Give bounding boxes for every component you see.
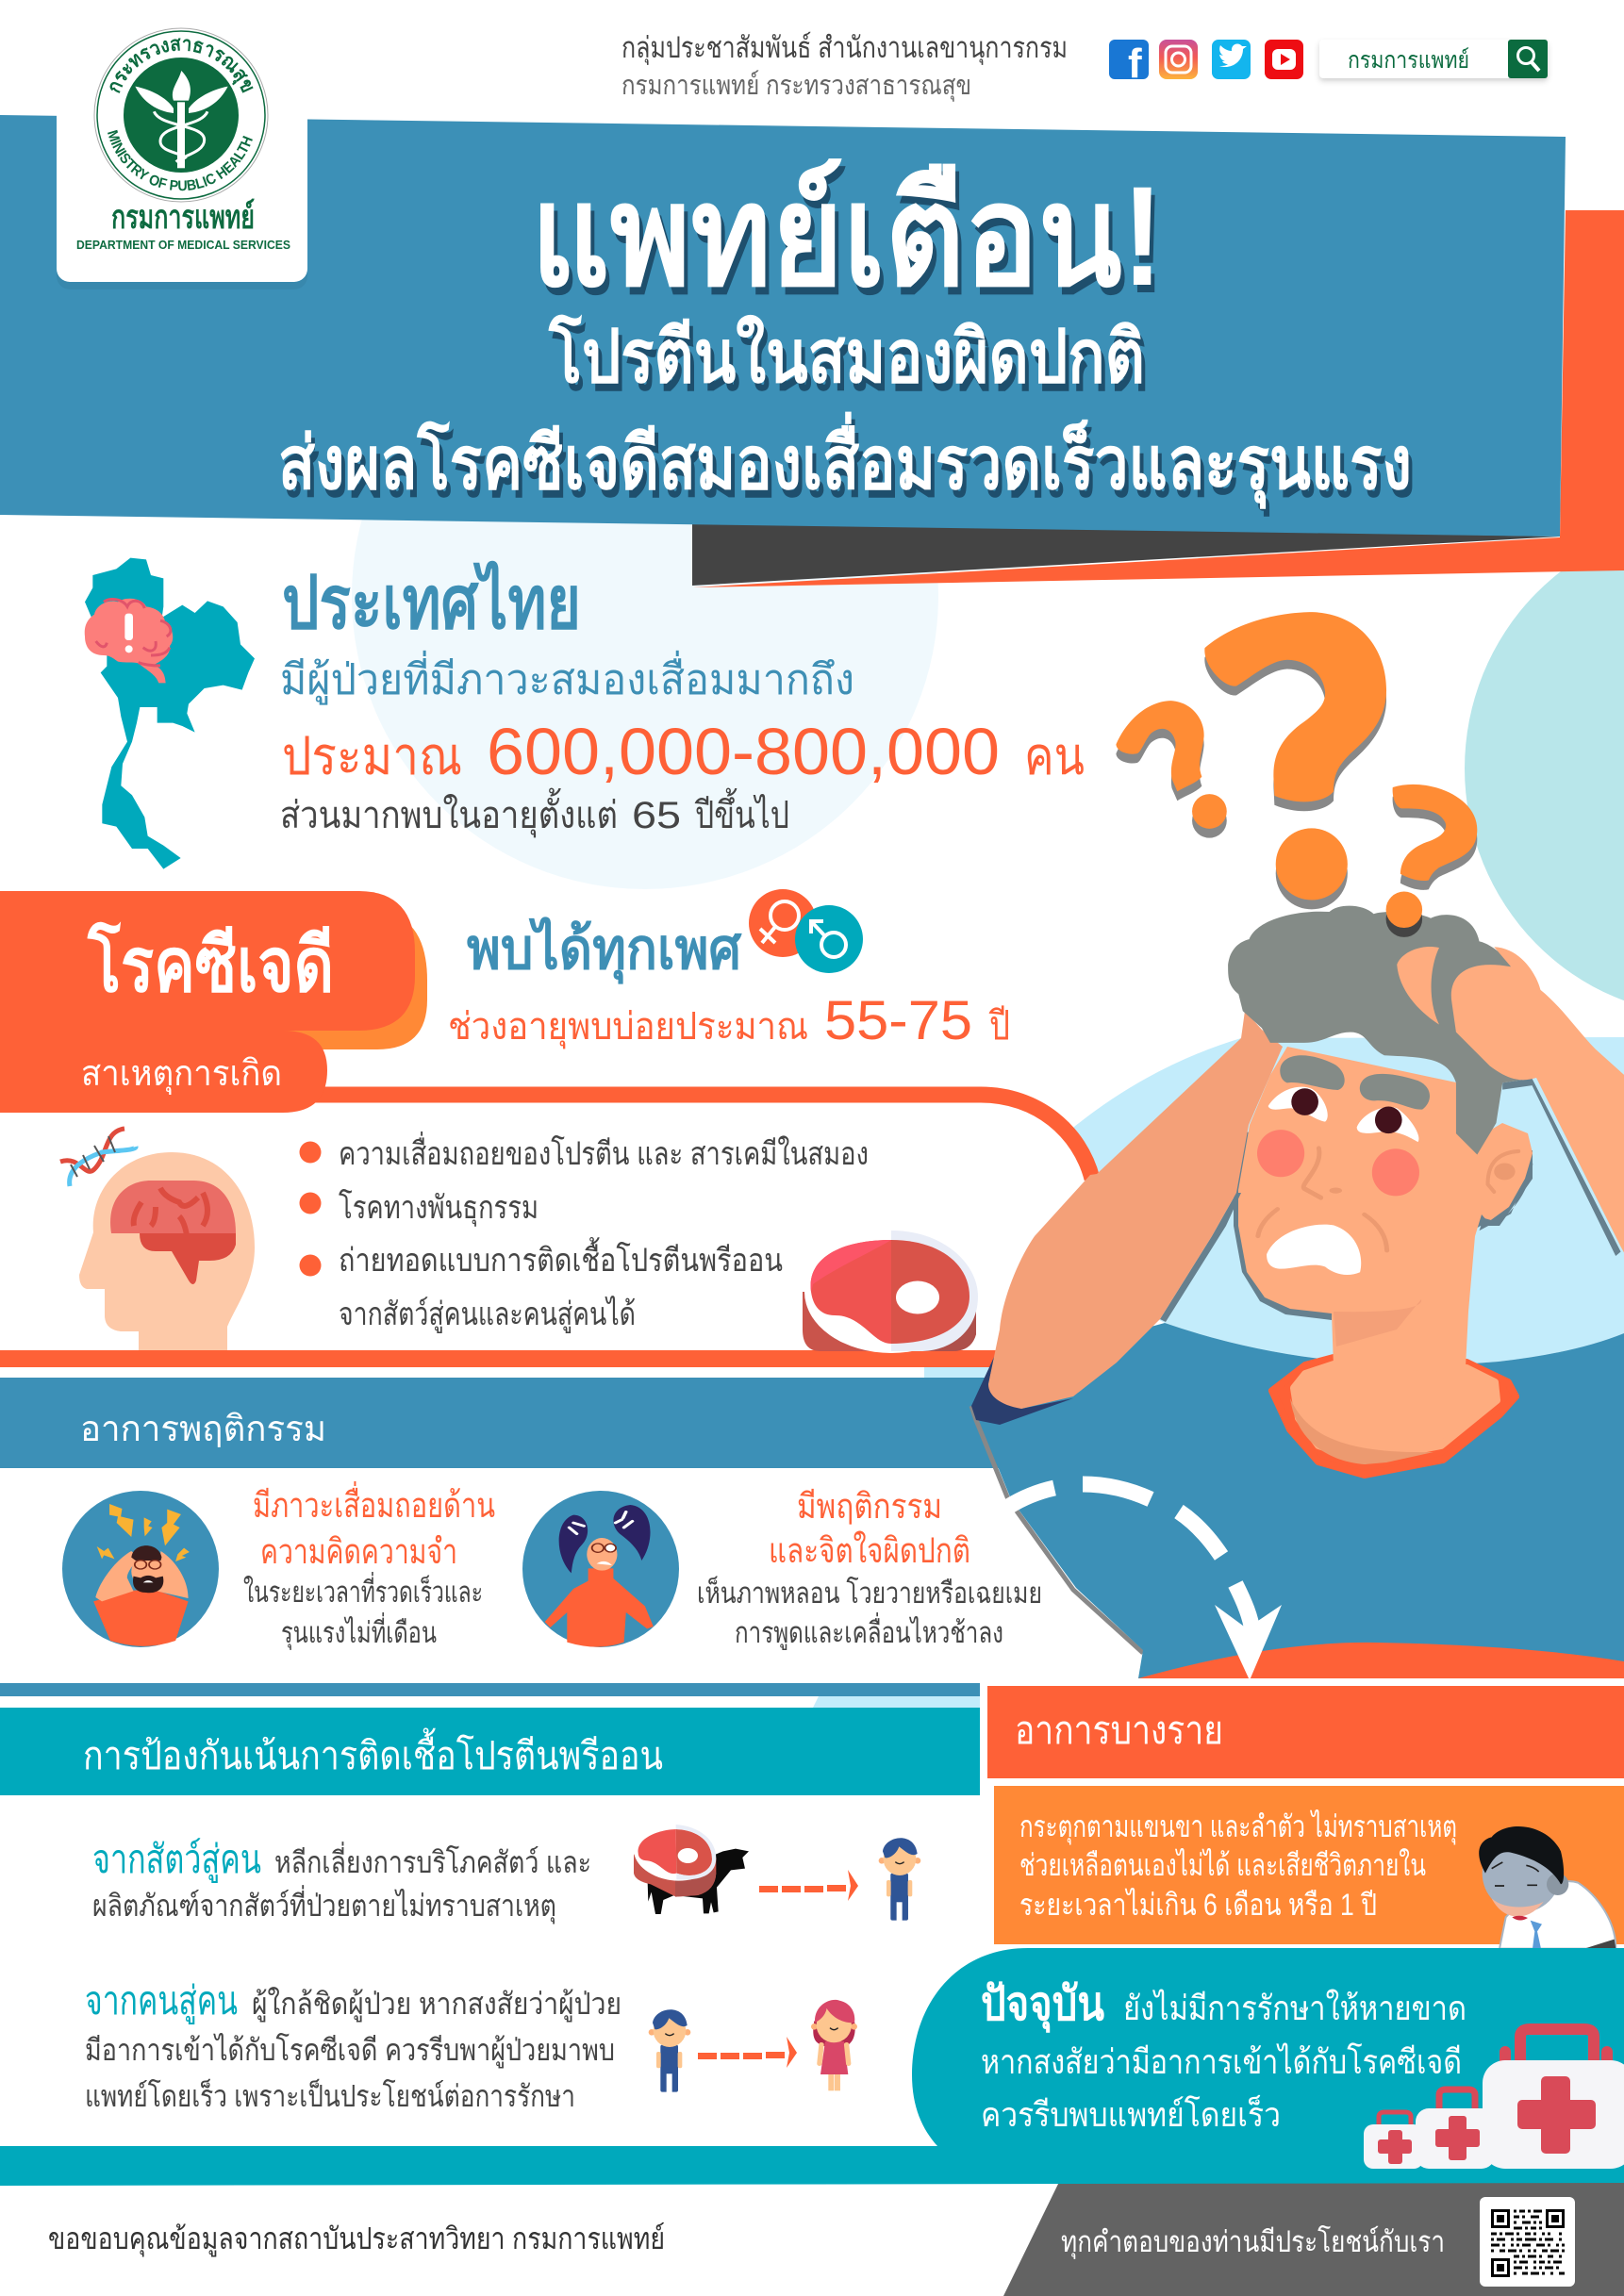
heading: some patients: อาการบางราย [1015,1709,1223,1752]
ear shadow [1480,1163,1533,1231]
logo seal: MINISTRY OF PUBLIC HEALTH [108,130,253,190]
behaviour heading: อาการพฤติกรรม [80,1410,326,1449]
background shape behind the head: light blue [981,1037,1624,1365]
title: ส่งผลโรคซีเจดีสมองเสื่อมรวดเร็วและรุนแรง [278,411,1412,509]
sleeve [971,1355,1073,1425]
text: animal to human: ผลิตภัณฑ์จากสัตว์ที่ป่วยตายไม่ทราบสาเหตุ [92,1885,556,1924]
icon: girl [811,2000,857,2090]
text: severe symptoms: ระยะเวลาไม่เกิน 6 เดือน หรือ 1 ปี [1019,1888,1377,1922]
left arm shadow [1160,1193,1241,1322]
text: age range 55-75: 55-75 [824,990,972,1051]
icon: gender symbols [749,889,863,973]
chest [1294,1364,1497,1461]
text: age 65: 65 [632,795,681,836]
text: current treatment: ควรรีบพบแพทย์โดยเร็ว [981,2093,1281,2134]
text: human to human: แพทย์โดยเร็ว เพราะเป็นประโยชน์ต่อการรักษา [85,2078,575,2113]
section bar: prevention [0,1708,980,1795]
stat: 600,000-800,000 patients: คน [1024,726,1085,785]
banner: title background [0,115,1566,537]
collar [1272,1358,1516,1475]
icon: meat and cow [630,1820,749,1914]
header text: department: กรมการแพทย์ กระทรวงสาธารณสุข [621,70,971,102]
shirt [971,1323,1624,1678]
arrow: animal to human [759,1870,858,1901]
arrow: human to human [698,2037,797,2068]
text: cognitive decline: ความคิดความจำ [260,1532,457,1571]
heading: causes: สาเหตุการเกิด [81,1054,282,1095]
text: all genders: พบได้ทุกเพศ [467,916,742,984]
text: age 65: ปีขึ้นไป [695,787,789,836]
bottom strip [0,2146,1624,2186]
header text: department [621,31,1068,102]
background circle: pale blue [352,303,938,889]
text: age range 55-75: ปี [988,1003,1010,1048]
text: human to human [85,1978,621,2113]
person: worried man [971,892,1624,1678]
text: current treatment [981,1977,1467,2134]
text: age range 55-75: ช่วงอายุพบบ่อยประมาณ [448,1006,808,1049]
text: cognitive decline: ในระยะเวลาที่รวดเร็วและ [243,1572,483,1609]
panel tab: CJD [0,891,415,1031]
text: animal to human: จากสัตว์สู่คน [92,1837,261,1883]
text: cognitive decline [243,1480,495,1651]
icon: instagram [1159,40,1198,79]
question mark dot over hair [1386,892,1422,937]
stat: 600,000-800,000 patients: 600,000-800,000 [487,715,1000,788]
background strip [924,1367,1000,1378]
right hand and arm [1451,947,1624,1277]
background blob: pale teal [1465,521,1624,1016]
divider strip [0,1683,980,1696]
logo name English: DEPARTMENT OF MEDICAL SERVICES [76,238,290,252]
eyebrows [1280,1055,1345,1090]
pale strip [813,1696,980,1708]
icon: twitter [1212,40,1251,79]
icon: meat [803,1231,978,1353]
icon: man with headache [62,1491,219,1647]
heading bar: some patients [987,1686,1624,1778]
text: current treatment: ปัจจุบัน [981,1977,1104,2033]
text: age range 55-75 [448,990,1010,1051]
mouth and wrinkles [1258,1209,1387,1275]
text: severe symptoms [1019,1809,1457,1922]
panel: current treatment [912,1948,1624,2169]
text: age 65 [280,787,789,838]
text: abnormal behaviour: เห็นภาพหลอน โวยวายหรือเฉยเมย [697,1576,1042,1610]
list: causes [300,1131,869,1333]
right arm shadow [1502,1079,1621,1256]
chest shadow [1290,1398,1433,1464]
fingers in hair [1397,947,1439,1025]
arrow: dashed down to symptoms [1008,1484,1282,1680]
text: severe symptoms: กระตุกตามแขนขา และลำตัว ไม่ทราบสาเหตุ [1019,1809,1457,1845]
icon: boy patient [649,2009,690,2092]
neck shadow [1334,1299,1421,1346]
panel: severe symptoms [994,1786,1624,1944]
panel frame: causes [0,1095,1092,1367]
text: human to human: มีอาการเข้าได้กับโรคซีเจดี ควรรีบพาผู้ป่วยมาพบ [85,2033,615,2069]
list: causes: โรคทางพันธุกรรม [339,1189,539,1227]
logo card [57,28,307,289]
icon: DNA [60,1129,136,1186]
logo seal: กระทรวงสาธารณสุข [109,38,254,93]
cheeks [1257,1130,1304,1177]
heading: CJD: โรคซีเจดี [87,920,334,1007]
text: severe symptoms: ช่วยเหลือตนเองไม่ได้ และเสียชีวิตภายใน [1019,1848,1426,1882]
panel tab: CJD shadow [0,910,427,1049]
heading: Thailand: ประเทศไทย [282,560,581,644]
icon: youtube [1265,40,1303,79]
ear detail [1488,1151,1518,1192]
text: human to human: ผู้ใกล้ชิดผู้ป่วย หากสงสัยว่าผู้ป่วย [252,1987,621,2023]
title: แพทย์เตือน! [531,157,1163,315]
footer: message: ทุกคำตอบของท่านมีประโยชน์กับเรา [1061,2225,1445,2260]
text: abnormal behaviour: การพูดและเคลื่อนไหวช้าลง [735,1612,1003,1650]
section bar: behaviour symptoms [0,1378,1000,1468]
tab: causes heading [0,1031,327,1113]
text: age 65: ส่วนมากพบในอายุตั้งแต่ [280,787,618,838]
nose [1303,1148,1321,1198]
logo seal [94,28,268,202]
list: causes: จากสัตว์สู่คนและคนสู่คนได้ [339,1296,636,1333]
text: abnormal behaviour: และจิตใจผิดปกติ [769,1530,970,1570]
jaw and arm shadow [1234,1131,1533,1320]
stat: 600,000-800,000 patients: ประมาณ [282,726,462,785]
footer: credit: ขอขอบคุณข้อมูลจากสถาบันประสาทวิทยา กรมการแพทย์ [48,2222,665,2257]
text: current treatment: ยังไม่มีการรักษาให้หายขาด [1123,1989,1467,2027]
text: current treatment: หากสงสัยว่ามีอาการเข้าได้กับโรคซีเจดี [981,2042,1462,2081]
logo name Thai: กรมการแพทย์ [111,198,255,236]
list: causes: ถ่ายทอดแบบการติดเชื้อโปรตีนพรีออน [339,1237,783,1279]
text: cognitive decline: รุนแรงไม่ที่เดือน [281,1612,437,1651]
text: cognitive decline: มีภาวะเสื่อมถอยด้าน [253,1480,495,1525]
icon: Thailand map with brain [85,558,255,869]
title: โปรตีนในสมองผิดปกติ [548,313,1145,398]
search box [1319,40,1548,78]
icon: facebook: f [1128,41,1142,87]
icon: tired man [1479,1826,1616,1949]
eyes [1268,1087,1328,1122]
heading: prevention: การป้องกันเน้นการติดเชื้อโปรตีนพรีออน [83,1727,663,1777]
hem [1138,1643,1624,1678]
hair [1228,906,1533,1155]
stat: 600,000-800,000 patients [282,715,1085,788]
icon: confused woman [522,1491,679,1647]
text: abnormal behaviour: มีพฤติกรรม [797,1487,942,1526]
icon: facebook [1109,40,1149,87]
face and neck [1238,1047,1533,1367]
header text: department: กลุ่มประชาสัมพันธ์ สำนักงานเลขานุการกรม [621,31,1068,66]
text: animal to human [92,1837,591,1924]
icon: boy [879,1838,920,1921]
icon: first aid kits [1364,2029,1624,2169]
title [278,157,1412,509]
text: human to human: จากคนสู่คน [85,1978,238,2024]
icon: head with brain [79,1152,255,1350]
text: patients: มีผู้ป่วยที่มีภาวะสมองเสื่อมมากถึง [280,650,854,705]
question marks [1116,612,1477,909]
banner accent: orange [692,210,1624,587]
text: animal to human: หลีกเลี่ยงการบริโภคสัตว์ และ [274,1842,591,1879]
list: causes: ความเสื่อมถอยของโปรตีน และ สารเคมีในสมอง [339,1131,869,1172]
banner fold: dark [692,521,1560,586]
QR code [1480,2197,1575,2287]
left arm [988,1011,1283,1409]
text: abnormal behaviour [697,1487,1042,1650]
search box: กรมการแพทย์ [1348,47,1469,74]
footer panel [1003,2178,1624,2296]
